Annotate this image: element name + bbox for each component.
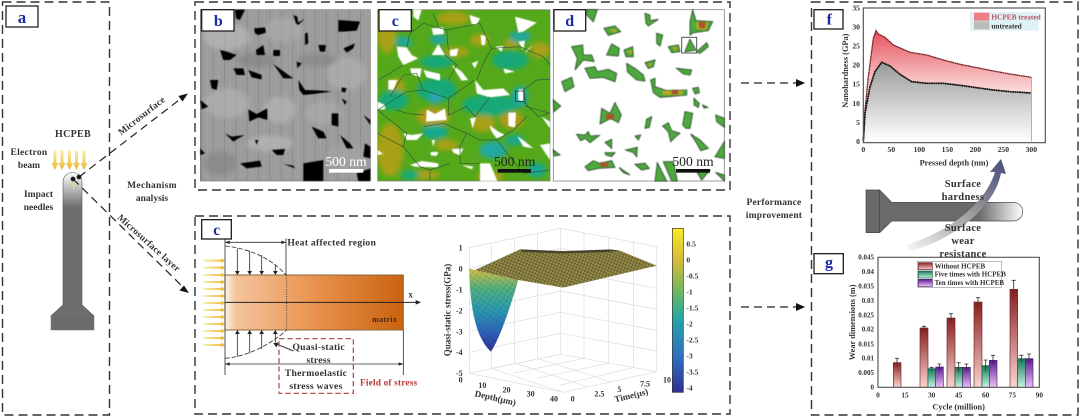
x tick labels: 0 bbox=[876, 390, 880, 399]
label: performance improvement: improvement bbox=[746, 211, 803, 221]
tick labels: 0 bbox=[571, 394, 575, 403]
untreated curve bbox=[863, 62, 1031, 141]
panel d label bbox=[554, 10, 586, 31]
y tick labels: 5 bbox=[856, 118, 860, 127]
panel c label bbox=[379, 10, 411, 31]
panel d: isolated stress grains bbox=[553, 10, 724, 181]
colorbar: -3.5 bbox=[686, 367, 699, 376]
tick labels: 7.5 bbox=[640, 380, 650, 389]
y tick labels: 0.01 bbox=[862, 355, 874, 363]
tick labels bbox=[459, 375, 671, 404]
error bars bbox=[895, 280, 1031, 372]
depth axis title: Depth(μm) bbox=[474, 388, 517, 408]
x tick labels: 50 bbox=[888, 145, 895, 154]
legend: HCPEB treated bbox=[991, 12, 1041, 21]
label: surface wear resistance: Surface bbox=[945, 223, 981, 234]
y tick labels: 0.045 bbox=[858, 254, 875, 262]
scale bar d: 500 nm bbox=[672, 154, 714, 169]
treated curve bbox=[863, 31, 1031, 141]
chart f: nanohardness bbox=[814, 4, 1045, 168]
panel c: stress simulation bbox=[377, 10, 550, 181]
colorbar bbox=[672, 228, 699, 392]
label: matrix: matrix bbox=[372, 315, 397, 324]
y tick labels: 0.025 bbox=[858, 311, 875, 319]
axis labels: -5 bbox=[456, 369, 463, 378]
treated area bbox=[863, 31, 1031, 141]
label: x axis: x bbox=[408, 289, 413, 299]
dimension and stress lines bbox=[225, 238, 417, 375]
arrow: microsurface layer bbox=[71, 177, 189, 293]
x tick labels: 150 bbox=[942, 145, 953, 154]
axis labels: -1 bbox=[456, 285, 463, 294]
y tick labels: 25 bbox=[852, 42, 860, 51]
arrow: to nanohardness bbox=[741, 79, 805, 87]
matrix bar bbox=[225, 275, 403, 330]
tick labels: 5 bbox=[617, 385, 621, 394]
x tick labels: 300 bbox=[1026, 145, 1037, 154]
axis labels: -2 bbox=[456, 306, 463, 315]
x tick labels: 0 bbox=[861, 145, 865, 154]
x tick labels: 200 bbox=[970, 145, 981, 154]
y axis title: Nanohardness (GPa) bbox=[841, 33, 850, 108]
y tick labels: 0 bbox=[870, 384, 874, 392]
x tick labels bbox=[861, 145, 1037, 154]
arrow: microsurface bbox=[77, 94, 188, 179]
scale bar b: 500 nm bbox=[325, 154, 367, 169]
panel a label: a bbox=[18, 8, 27, 27]
x tick labels: 100 bbox=[914, 145, 925, 154]
panel: performance results bbox=[812, 2, 1078, 415]
legend bbox=[970, 12, 1041, 31]
3D grid walls bbox=[469, 228, 657, 392]
label: surface wear resistance: wear bbox=[951, 236, 975, 247]
stress field schematic bbox=[202, 220, 421, 393]
label: electron beam: beam bbox=[18, 161, 40, 171]
y tick labels: 0.005 bbox=[858, 369, 875, 377]
x tick labels: 60 bbox=[982, 390, 990, 399]
label: quasi-static stress: stress bbox=[306, 355, 331, 366]
panel g label: g bbox=[825, 254, 833, 271]
label: microsurface layer: Microsurface layer bbox=[115, 213, 182, 275]
colorbar: -2.5 bbox=[686, 335, 699, 344]
panel b: SEM image bbox=[200, 10, 370, 181]
chart g: wear dimensions bbox=[814, 254, 1043, 412]
label: heat affected region: Heat affected region bbox=[287, 238, 377, 249]
x tick labels: 45 bbox=[955, 390, 963, 399]
surface: plateau bbox=[475, 249, 657, 288]
tick labels: 10 bbox=[478, 381, 486, 390]
panel e label: c bbox=[213, 222, 220, 239]
icon: impact needle bbox=[51, 172, 94, 330]
tick labels: 10 bbox=[663, 375, 671, 384]
y tick labels: 0.015 bbox=[858, 340, 875, 348]
panel a label bbox=[6, 6, 38, 27]
y axis title: Wear dimensions (m) bbox=[848, 284, 857, 360]
3D surface plot bbox=[443, 228, 699, 408]
label: thermoelastic stress waves: stress waves bbox=[289, 381, 343, 392]
bars bbox=[893, 289, 1033, 387]
tick labels: 0 bbox=[459, 376, 463, 385]
x tick labels: 250 bbox=[998, 145, 1009, 154]
y tick labels: 20 bbox=[852, 61, 860, 70]
x tick labels: 15 bbox=[901, 390, 909, 399]
x tick labels: 30 bbox=[928, 390, 936, 399]
axis labels bbox=[456, 243, 463, 378]
legend bbox=[917, 261, 1006, 287]
panel f label bbox=[814, 10, 843, 29]
axes frame bbox=[878, 257, 1039, 387]
needle horizontal bbox=[866, 190, 1023, 233]
time axis title: Time(μs) bbox=[613, 386, 649, 404]
scale bar c: 500 nm bbox=[494, 154, 536, 169]
y tick labels: 10 bbox=[852, 99, 860, 108]
label: quasi-static stress: Quasi-static bbox=[292, 342, 345, 353]
label: surface wear resistance: resistance bbox=[939, 249, 987, 260]
red dashed box bbox=[279, 339, 353, 393]
legend: Five times with HCPEB bbox=[935, 271, 1006, 279]
colorbar: -3 bbox=[686, 351, 693, 360]
label: impact needles: needles bbox=[24, 203, 54, 213]
y axis title: Quasi-static stress(GPa) bbox=[443, 264, 453, 356]
x tick labels: 90 bbox=[1036, 390, 1043, 399]
x axis title: Pressed depth (nm) bbox=[920, 159, 989, 168]
colorbar: -1 bbox=[686, 287, 693, 296]
arrow: to wear bbox=[741, 303, 805, 311]
colorbar: 0.5 bbox=[686, 239, 696, 248]
y tick labels: 15 bbox=[852, 80, 860, 89]
label: field of stress: Field of stress bbox=[360, 379, 417, 389]
label: surface hardness: Surface bbox=[945, 179, 981, 190]
tick labels: 20 bbox=[503, 386, 511, 395]
y tick labels: 0.04 bbox=[862, 268, 874, 276]
legend: Ten times with HCPEB bbox=[935, 279, 1004, 287]
panel d label: d bbox=[565, 13, 574, 30]
x tick labels: 75 bbox=[1009, 390, 1016, 399]
legend: untreated bbox=[991, 21, 1022, 30]
heading: HCPEB: HCPEB bbox=[55, 129, 91, 140]
panel c label: c bbox=[392, 13, 399, 30]
panel: microsurface layer stress bbox=[195, 216, 730, 414]
panel e label bbox=[202, 220, 231, 239]
surface: wedge bbox=[469, 268, 518, 352]
label: mechanism analysis: Mechanism bbox=[127, 181, 177, 191]
label: performance improvement: Performance bbox=[747, 198, 801, 208]
untreated area bbox=[863, 62, 1031, 141]
colorbar: -1.5 bbox=[686, 303, 699, 312]
axes frame bbox=[863, 8, 1045, 143]
y tick labels: 0.02 bbox=[862, 326, 874, 334]
panel: microsurface microstructure bbox=[195, 2, 730, 190]
y tick labels bbox=[858, 254, 875, 392]
tick labels: 30 bbox=[527, 390, 535, 399]
label: microsurface: Microsurface bbox=[117, 95, 168, 138]
y tick labels: 0.03 bbox=[862, 297, 874, 305]
label: thermoelastic stress waves: Thermoelastic bbox=[285, 368, 348, 379]
axis labels: 1 bbox=[459, 243, 463, 252]
colorbar: -4 bbox=[686, 383, 693, 392]
tick labels: 2.5 bbox=[594, 389, 604, 398]
y tick labels bbox=[852, 4, 860, 146]
y tick labels: 30 bbox=[852, 22, 860, 31]
axis labels: 0 bbox=[459, 264, 463, 273]
colorbar: 0 bbox=[686, 255, 690, 264]
tick labels: 40 bbox=[550, 395, 558, 404]
panel a: impact needle bbox=[2, 2, 110, 415]
y tick labels: 0.035 bbox=[858, 283, 875, 291]
label: electron beam: Electron bbox=[10, 148, 48, 158]
panel b label bbox=[202, 10, 234, 31]
panel g label bbox=[814, 254, 843, 274]
legend: Without HCPEB bbox=[935, 262, 986, 270]
panel f label: f bbox=[827, 12, 833, 29]
y tick labels: 35 bbox=[852, 4, 860, 13]
arrow: performance increase bbox=[906, 159, 1006, 251]
icon: electron beam arrows bbox=[52, 150, 88, 170]
label: surface hardness: hardness bbox=[942, 192, 984, 203]
label: impact needles: Impact bbox=[24, 190, 54, 200]
y tick labels: 0 bbox=[856, 137, 860, 146]
label: mechanism analysis: analysis bbox=[136, 194, 168, 204]
colorbar: -0.5 bbox=[686, 271, 699, 280]
axis labels: -4 bbox=[456, 348, 463, 357]
incoming beam arrows bbox=[203, 258, 225, 348]
x tick labels bbox=[876, 390, 1043, 399]
axis labels: -3 bbox=[456, 327, 463, 336]
colorbar: -2 bbox=[686, 319, 693, 328]
panel b label: b bbox=[214, 13, 223, 30]
x axis title: Cycle (million) bbox=[932, 403, 985, 412]
